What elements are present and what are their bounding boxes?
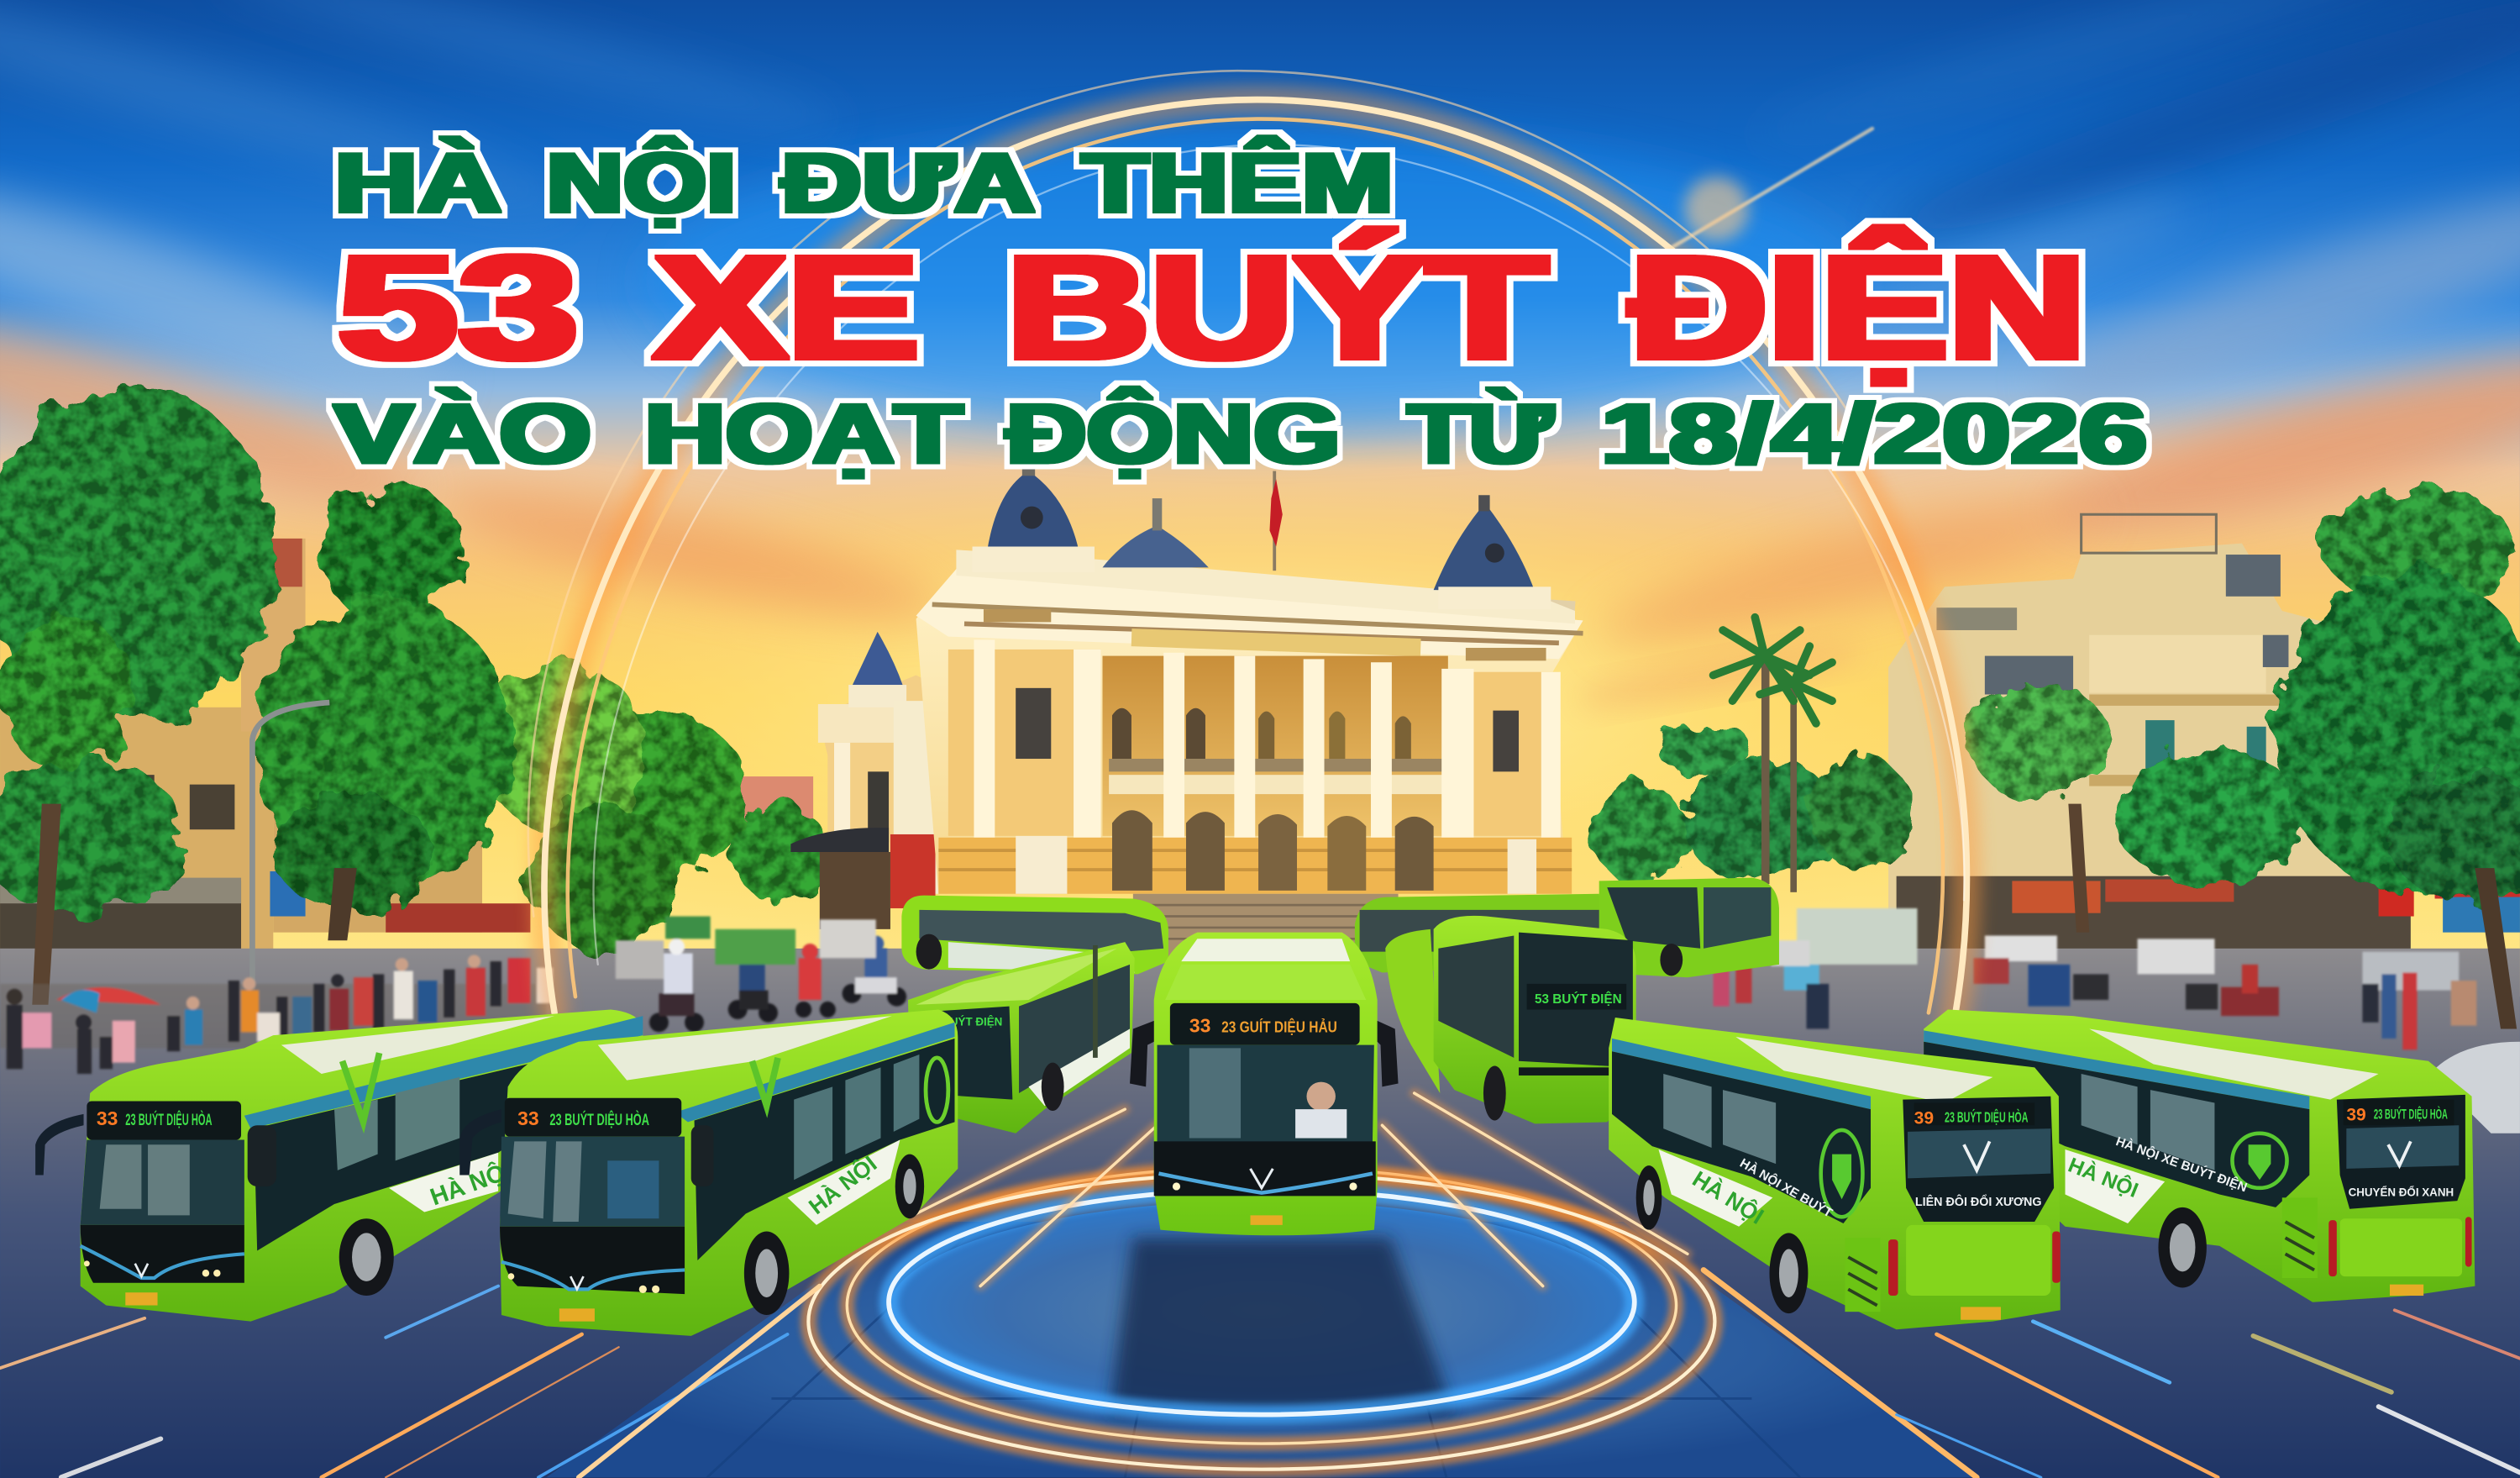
- bus: front left: [35, 1009, 643, 1322]
- bus: front middle left: [459, 1009, 958, 1336]
- bus: front left: 33: [97, 1107, 118, 1129]
- bus: centre front: [1130, 933, 1399, 1235]
- bus: double deck right centre: [1385, 916, 1636, 1123]
- title line 3: ĐỘNG: [1006, 386, 1341, 481]
- background: right street buildings: [1888, 514, 2520, 965]
- light ring: [528, 71, 1966, 1028]
- bus: centre front: 23 GUÍT DIỆU HẢU: [1221, 1018, 1337, 1035]
- stairs: [1133, 894, 1399, 958]
- bus: articulated centre left: 53 BUÝT ĐIỆN: [927, 1016, 1002, 1028]
- title line 2: BUÝT: [1006, 226, 1547, 391]
- title: [334, 135, 2147, 481]
- main facade: [916, 550, 1583, 894]
- opera house: [790, 460, 1583, 958]
- bus: front middle left: 33: [517, 1107, 539, 1129]
- balustrade: [956, 550, 1575, 623]
- title line 3: 18/4/2026: [1601, 387, 2147, 481]
- background: left street buildings: [0, 539, 813, 997]
- bus: front left: HÀ NỘI: [426, 1155, 515, 1211]
- bus: articulated centre left: [908, 942, 1135, 1133]
- title line 2: [338, 226, 2086, 391]
- flag: [1269, 471, 1283, 571]
- background: road: [0, 949, 2520, 1478]
- silver parked car: [2430, 1042, 2520, 1133]
- golden bays: [948, 650, 1559, 836]
- left wing: [818, 632, 948, 894]
- bus: far left background: [901, 896, 1168, 974]
- background: sunset sky: [0, 0, 2520, 997]
- bus: rear near right: 39: [1914, 1108, 1934, 1128]
- road light streaks: [0, 1093, 2520, 1477]
- bus: rear near right: [1609, 1018, 2061, 1329]
- title line 2: XE: [654, 226, 919, 391]
- columns: [974, 639, 1561, 845]
- bus: rear far right: CHUYỂN ĐỔI XANH: [2349, 1186, 2454, 1198]
- domes: [973, 460, 1551, 609]
- canopy and red poster: [790, 828, 936, 929]
- bus: double deck right centre: 53 BUÝT ĐIỆN: [1535, 991, 1622, 1007]
- title line 3: TỪ: [1408, 387, 1553, 481]
- title line 1: [334, 135, 1394, 231]
- title line 2: 53: [338, 226, 579, 391]
- bus: rear near right: 23 BUÝT DIỆU HÒA: [1945, 1108, 2029, 1125]
- bus: rear far right: 39: [2346, 1106, 2366, 1125]
- title line 1: ĐƯA: [781, 136, 1035, 231]
- bus: rear near right: HÀ NỘI: [1688, 1165, 1768, 1229]
- bus: rear far right: HÀ NỘI XE BUÝT ĐIỆN: [2113, 1133, 2250, 1195]
- title line 1: NỘI: [547, 135, 736, 231]
- title line 3: VÀO: [334, 387, 591, 481]
- title line 3: [334, 386, 2147, 481]
- bus: front middle left: 23 BUÝT DIỆU HÒA: [549, 1111, 649, 1129]
- title line 3: HOẠT: [644, 387, 963, 481]
- rusticated base with arches: [938, 810, 1572, 894]
- bus: front left: 23 BUÝT DIỆU HÒA: [125, 1111, 213, 1129]
- bus: rear near right: LIÊN ĐÔI ĐỔI XƯƠNG: [1915, 1194, 2042, 1209]
- bus: rear far right: HÀ NỘI: [2065, 1152, 2142, 1202]
- bus: rear far right: 23 BUÝT DIỆU HÒA: [2374, 1107, 2448, 1123]
- bus: front middle left: HÀ NỘI: [804, 1150, 881, 1219]
- title line 1: HÀ: [334, 136, 501, 231]
- tree trunks, palms and street lamp: [32, 618, 2517, 1028]
- bus: rear far right: [1924, 1009, 2475, 1302]
- bus: far right background group: [1355, 878, 1779, 977]
- bus: centre front: 33: [1189, 1014, 1210, 1036]
- crowd and motorbikes: [0, 908, 2520, 1133]
- title line 1: THÊM: [1082, 135, 1394, 231]
- plaza floor and glowing platform: [547, 1167, 1977, 1477]
- bus: rear near right: HÀ NỘI XE BUÝT: [1737, 1155, 1835, 1221]
- trees: [0, 386, 2520, 950]
- title line 2: ĐIỆN: [1630, 226, 2086, 391]
